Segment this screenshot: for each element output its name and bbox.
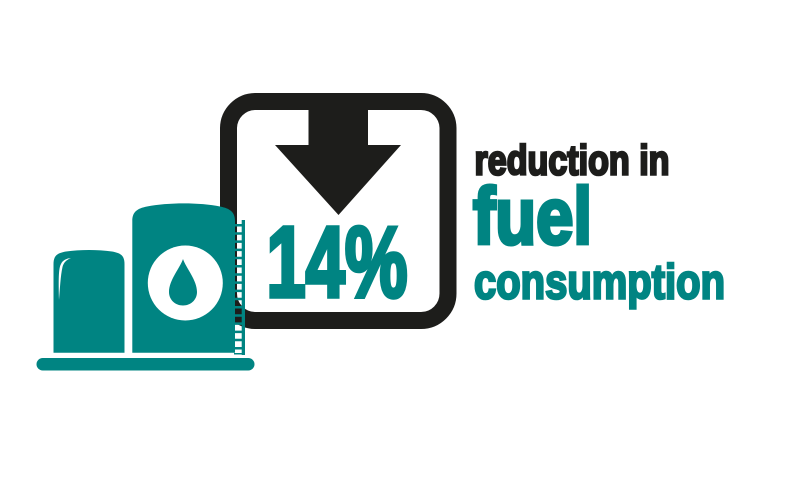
figure: 14%: 14%	[266, 206, 408, 318]
heading: consumption: consumption	[474, 256, 725, 310]
rounded square frame	[228, 102, 448, 320]
icon: fuel drop	[169, 259, 197, 306]
icon: fuel tanks	[36, 203, 254, 370]
small tank highlight	[59, 258, 71, 300]
large tank	[132, 203, 235, 353]
heading: reduction in: reduction in	[474, 136, 670, 184]
tank circle	[148, 246, 223, 320]
panel: rounded square with reduction figure	[228, 102, 448, 320]
text block: caption	[473, 136, 725, 310]
heading: fuel: fuel	[473, 172, 592, 260]
ladder	[234, 220, 245, 355]
icon: down arrow	[275, 105, 401, 215]
base platform	[36, 358, 254, 370]
small tank	[54, 250, 124, 353]
